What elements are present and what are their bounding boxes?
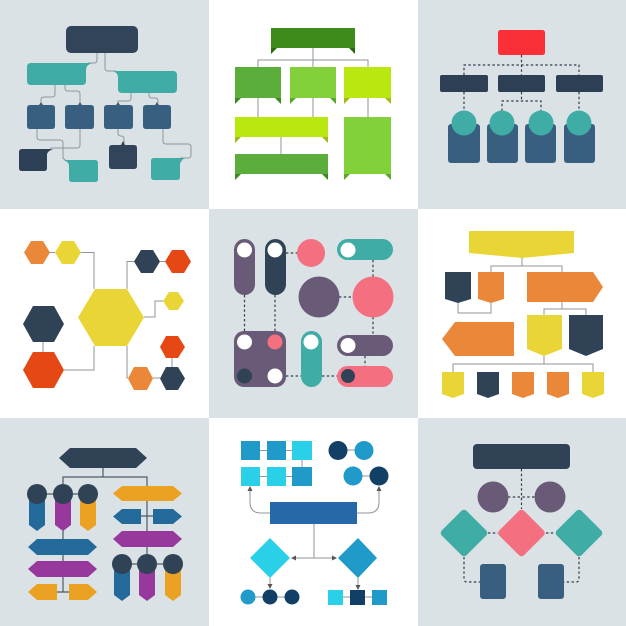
circle pair top xyxy=(328,441,374,460)
flag blue xyxy=(27,484,47,531)
pill purple horizontal xyxy=(337,335,393,356)
top hexagon xyxy=(59,448,147,468)
small shield 1 xyxy=(442,372,464,398)
dark box right xyxy=(556,75,603,92)
arrow orange right xyxy=(527,272,603,302)
hex yellow centre xyxy=(78,289,144,346)
teal callout right xyxy=(151,158,185,180)
connector lines xyxy=(37,468,173,592)
shield yellow large xyxy=(527,315,562,356)
ribbon row1 a xyxy=(235,67,281,104)
flag amber xyxy=(78,484,98,531)
hex red right top xyxy=(165,250,191,273)
diamond centre xyxy=(497,508,546,558)
half hexagon blue left xyxy=(113,509,141,524)
connector lines xyxy=(37,53,191,161)
hex dark bottom xyxy=(160,367,185,390)
red box xyxy=(498,30,545,55)
dashed connectors xyxy=(244,253,373,376)
callout right xyxy=(113,71,177,93)
blue node 2 xyxy=(65,102,94,129)
diamond blue xyxy=(338,538,377,578)
flag purple right xyxy=(137,554,157,601)
diamond cyan xyxy=(250,538,290,578)
ribbon wide green xyxy=(235,154,328,180)
ribbon wide lime xyxy=(235,117,328,143)
shield orange xyxy=(478,272,504,303)
square grid xyxy=(241,441,312,486)
hexagon blue left xyxy=(28,539,97,555)
dark node middle xyxy=(109,141,137,169)
rectangle left xyxy=(480,564,506,599)
hex dark large xyxy=(23,306,64,342)
circle pink small xyxy=(297,239,325,267)
panel: diamonds decision flow xyxy=(439,444,604,599)
square row xyxy=(328,590,387,605)
circle purple large xyxy=(298,276,340,318)
pill pink horizontal xyxy=(337,366,393,387)
card 2 xyxy=(487,110,518,163)
shield dark xyxy=(445,272,471,303)
circle pair lower xyxy=(344,466,388,486)
flag amber right xyxy=(163,554,183,601)
panel: green ribbon org chart xyxy=(235,28,391,180)
top box xyxy=(473,444,570,469)
dark callout left xyxy=(19,149,53,171)
card 3 xyxy=(525,110,556,163)
small shield 3 xyxy=(512,372,534,398)
connector lines xyxy=(250,450,379,597)
dashed connectors xyxy=(464,55,579,111)
blue node 1 xyxy=(27,102,55,129)
hexagon purple left xyxy=(28,561,97,577)
pill purple xyxy=(234,239,255,295)
callout left xyxy=(27,63,92,85)
ribbon tall xyxy=(344,117,391,180)
circle right xyxy=(534,482,566,512)
shield dark large xyxy=(569,315,603,356)
panel: pills and circles xyxy=(234,239,394,387)
panel: ribbons and elongated hexagons xyxy=(27,448,183,601)
small shield 5 xyxy=(582,372,604,398)
circle left xyxy=(478,482,508,512)
card 4 xyxy=(564,110,595,163)
half hexagon amber right xyxy=(69,584,97,600)
panel: rounded callout flowchart xyxy=(19,26,191,182)
flag blue right xyxy=(112,554,132,601)
hex dark right top xyxy=(134,250,160,273)
arrow orange left xyxy=(442,322,514,356)
half hexagon blue right xyxy=(153,509,182,524)
hexagon purple right xyxy=(113,531,182,547)
dark box left xyxy=(440,75,488,92)
diamond right xyxy=(554,508,604,558)
arrow heads xyxy=(248,486,382,590)
half hexagon amber left xyxy=(28,584,57,600)
blue node 3 xyxy=(104,102,133,129)
main rectangle xyxy=(270,502,357,524)
small shield 2 xyxy=(477,372,499,398)
connector lines xyxy=(258,48,368,154)
panel: shield and arrow org chart xyxy=(442,231,604,398)
hex orange top xyxy=(24,241,50,264)
flag purple xyxy=(53,484,73,531)
circle pink large xyxy=(352,276,394,318)
dashed connectors xyxy=(464,469,579,582)
circle row xyxy=(240,590,300,604)
rectangle right xyxy=(538,564,564,599)
ribbon top xyxy=(271,28,355,54)
hex red large xyxy=(23,352,64,388)
panel: hexagon mind map xyxy=(23,241,191,390)
small shield 4 xyxy=(547,372,569,398)
pill dark xyxy=(265,239,286,295)
diamond left xyxy=(439,508,489,558)
pill teal horizontal xyxy=(337,239,393,260)
card 1 xyxy=(448,110,480,163)
hex yellow small xyxy=(163,292,184,310)
hex yellow top xyxy=(55,241,81,264)
top banner xyxy=(469,231,574,258)
connector lines xyxy=(453,258,593,372)
hex orange bottom xyxy=(128,367,153,390)
connector lines xyxy=(43,252,172,378)
hex red lower right xyxy=(160,336,185,358)
ribbon row1 b xyxy=(290,67,336,104)
panel: dashed hierarchy with circles xyxy=(440,30,603,163)
pill teal vertical xyxy=(301,331,322,387)
square with dots xyxy=(234,331,286,387)
panel: blue process flow xyxy=(240,441,388,605)
blue node 4 xyxy=(143,102,171,129)
teal callout bottom xyxy=(64,160,98,182)
hexagon amber right xyxy=(113,486,182,501)
ribbon row1 c xyxy=(344,67,391,104)
top box xyxy=(66,26,138,53)
dark box middle xyxy=(498,75,545,92)
